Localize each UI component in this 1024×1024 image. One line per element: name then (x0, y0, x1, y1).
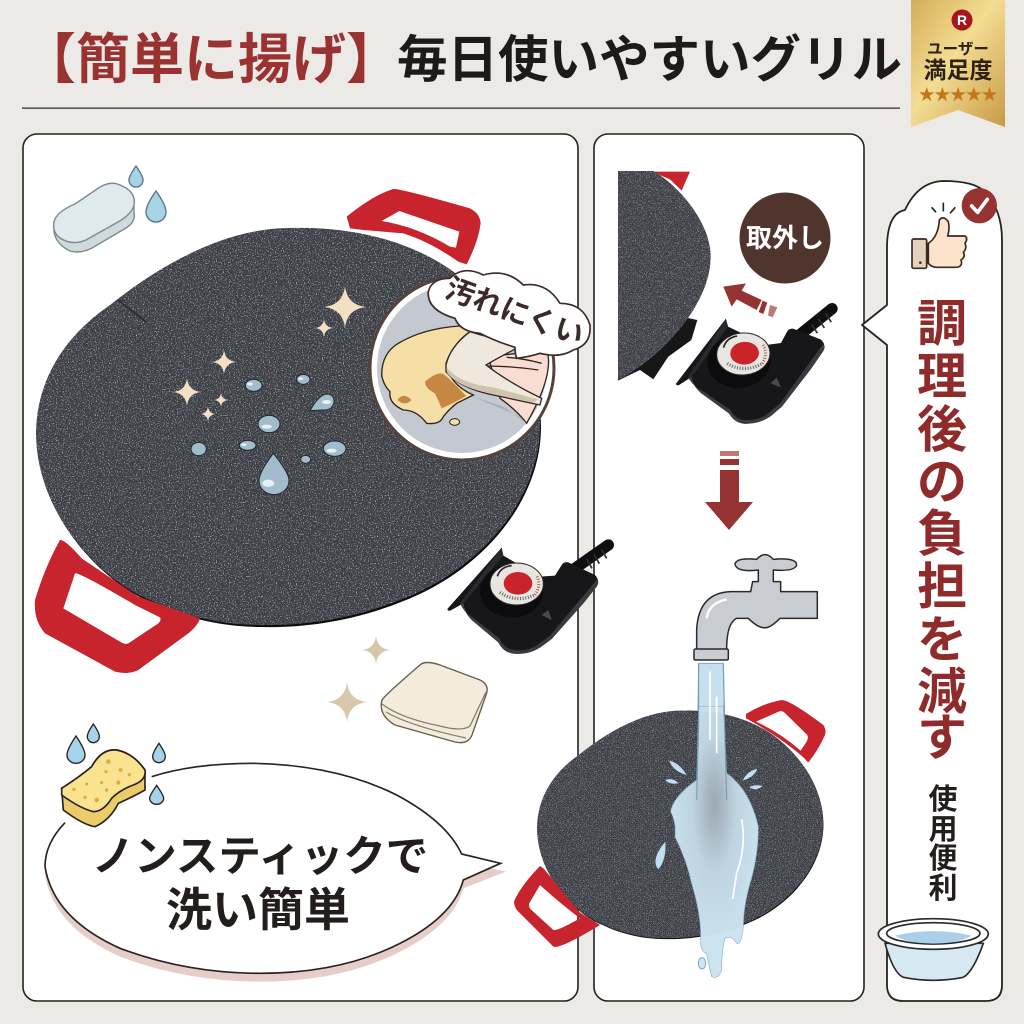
badge: user satisfaction (911, 0, 1005, 127)
icon: yellow sponge with drops (62, 724, 165, 827)
water stream and puddle (655, 663, 763, 977)
icon: blue sponge with drops (54, 166, 166, 252)
vertical heading: 理 (917, 349, 967, 405)
speech bubble: easy wash: 洗い簡単 (166, 884, 350, 936)
icon: water basin (878, 919, 988, 980)
vertical heading: 負 (917, 506, 967, 562)
inset: wiping stain (370, 276, 554, 460)
vertical heading: 担 (917, 559, 967, 615)
vertical subtext: 便 (928, 842, 958, 875)
badge: user satisfaction: 満足度 (924, 57, 992, 83)
vertical heading: す (917, 710, 967, 766)
badge: user satisfaction: R (957, 12, 967, 28)
icon: faucet (694, 555, 817, 800)
main grill: bottom handle (35, 540, 200, 673)
vertical subtext (928, 783, 958, 905)
icon: temperature connector on first panel (447, 545, 608, 654)
vertical heading: の (917, 454, 967, 510)
title: 毎日使いやすいグリル (397, 31, 902, 88)
cloud label: dirt resistant: 汚れにくい (441, 272, 588, 352)
water droplets (191, 374, 346, 495)
vertical subtext: 用 (928, 814, 958, 846)
icon: thumbs up with check (912, 188, 997, 268)
vertical heading (917, 296, 967, 766)
speech bubble: easy wash: ノンスティックで (92, 834, 428, 881)
title (22, 30, 902, 90)
badge: user satisfaction: ★★★★★ (919, 87, 998, 104)
sparkles on plate (173, 286, 366, 422)
label: remove (740, 192, 830, 284)
vertical subtext: 利 (928, 872, 958, 905)
panel: reduce burden after cooking (862, 181, 1002, 1001)
badge: user satisfaction: ユーザー (927, 40, 989, 58)
main grill: speckled plate (36, 228, 541, 627)
icon: temperature connector removed (671, 309, 840, 429)
speech bubble: easy wash (45, 763, 506, 982)
label: remove: 取外し (746, 223, 824, 253)
partial plate detached (618, 171, 711, 381)
vertical subtext: 使 (928, 783, 958, 816)
panel: removable and washable (514, 134, 864, 1001)
vertical heading: 調 (917, 296, 967, 352)
panel: non-stick grill (23, 134, 590, 1001)
title: 【簡単に揚げ】 (22, 30, 400, 90)
vertical heading: 減 (917, 664, 967, 720)
vertical heading: 後 (917, 402, 967, 458)
vertical heading: を (917, 612, 967, 668)
icon: folded cloth and sparkles (327, 636, 487, 743)
arrow: down (705, 451, 753, 530)
arrow: detach (723, 283, 777, 317)
main grill: top handle (347, 189, 481, 264)
plate under running water (514, 700, 826, 947)
